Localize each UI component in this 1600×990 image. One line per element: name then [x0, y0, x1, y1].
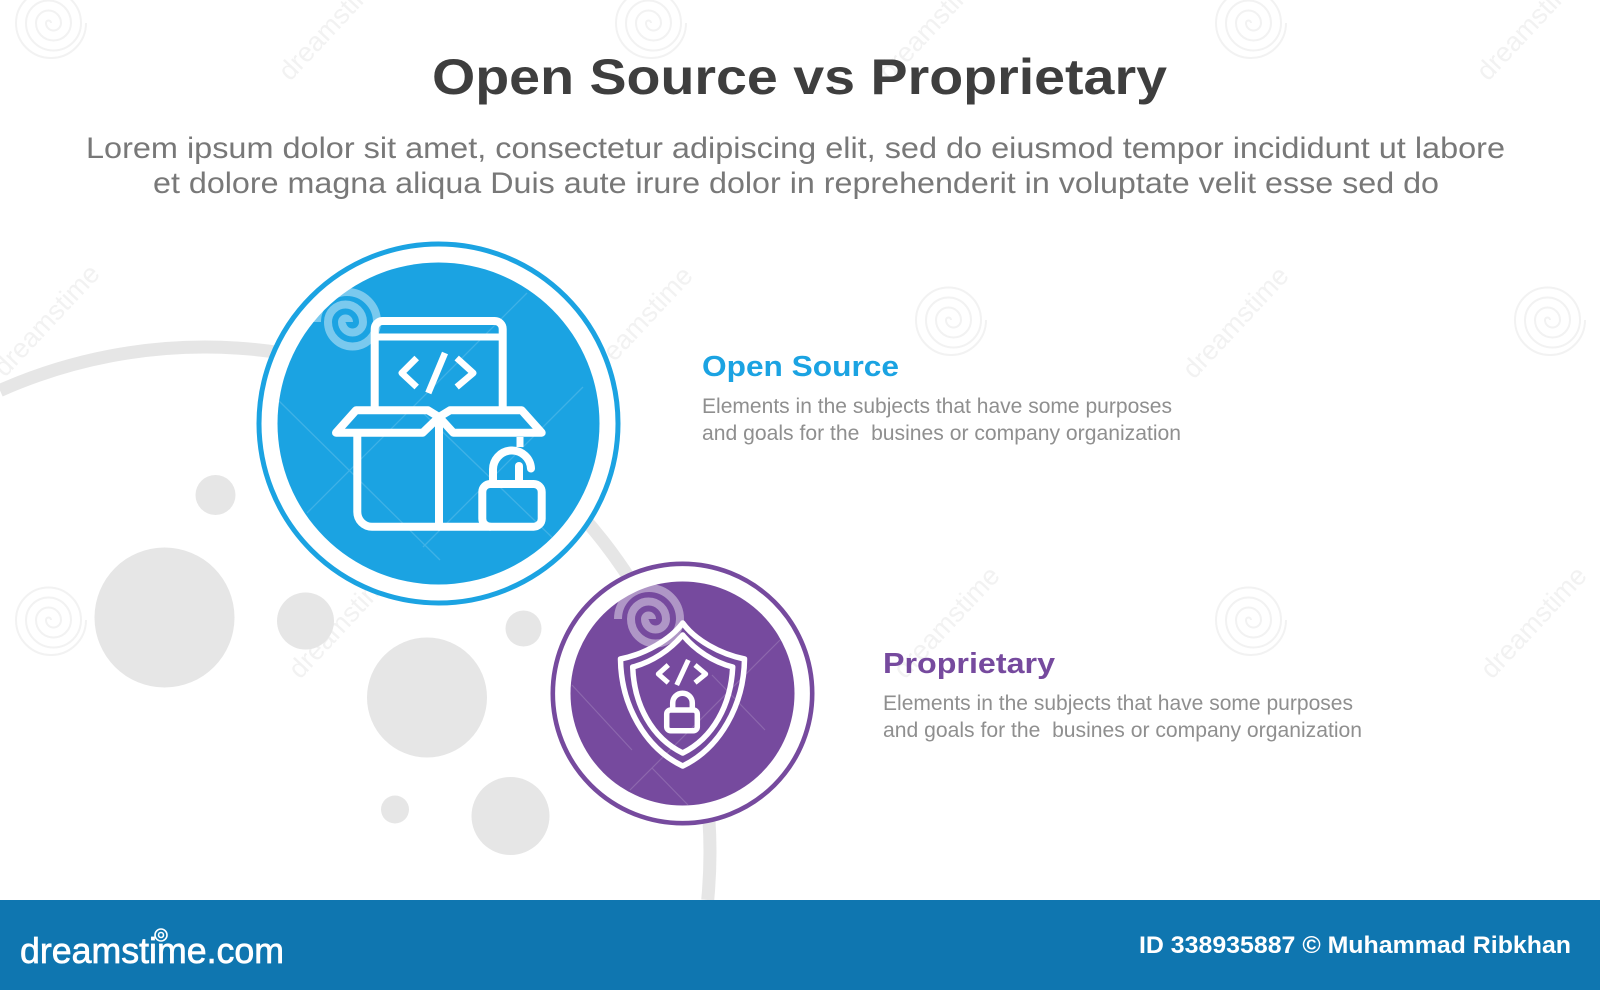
icon: open box with code window and unlocked padlock — [336, 321, 542, 527]
panel: proprietary circle — [553, 564, 812, 823]
description: open source — [702, 395, 1181, 445]
footer credit: ID 338935887 © Muhammad Ribkhan — [1139, 932, 1571, 959]
subtitle — [86, 132, 1505, 200]
background arc — [0, 347, 710, 900]
icon: logo swirl — [155, 929, 167, 941]
background watermark pattern: dreamstime — [282, 560, 401, 684]
description: proprietary: Elements in the subjects that have some purposes — [883, 692, 1353, 715]
description: proprietary: and goals for the busines or company organization — [883, 719, 1362, 742]
background watermark pattern: dreamstime — [580, 260, 699, 384]
background dots — [94, 475, 550, 855]
footer logo: dreamstime.com — [20, 930, 284, 971]
watermark swirl — [317, 292, 377, 346]
background watermark pattern: dreamstime — [887, 560, 1006, 684]
text block: open source — [702, 351, 1181, 445]
icon: shield with code and padlock — [620, 623, 744, 766]
watermark swirl — [618, 588, 680, 644]
background watermark pattern — [0, 0, 1593, 684]
description: open source: Elements in the subjects that have some purposes — [702, 395, 1172, 418]
heading: proprietary: Proprietary — [883, 648, 1055, 680]
background watermark pattern: dreamstime — [1176, 260, 1295, 384]
description: open source: and goals for the busines or company organization — [702, 422, 1181, 445]
heading: open source: Open Source — [702, 351, 899, 383]
title: Open Source vs Proprietary — [432, 49, 1167, 105]
subtitle: Lorem ipsum dolor sit amet, consectetur adipiscing elit, sed do eiusmod tempor incididunt ut labore — [86, 132, 1505, 165]
text block: proprietary — [883, 648, 1362, 742]
description: proprietary — [883, 692, 1362, 742]
background watermark pattern: dreamstime — [1474, 560, 1593, 684]
panel: open source circle — [259, 244, 618, 603]
footer bar — [0, 900, 1600, 990]
subtitle: et dolore magna aliqua Duis aute irure dolor in reprehenderit in voluptate velit esse sed do — [153, 167, 1439, 200]
